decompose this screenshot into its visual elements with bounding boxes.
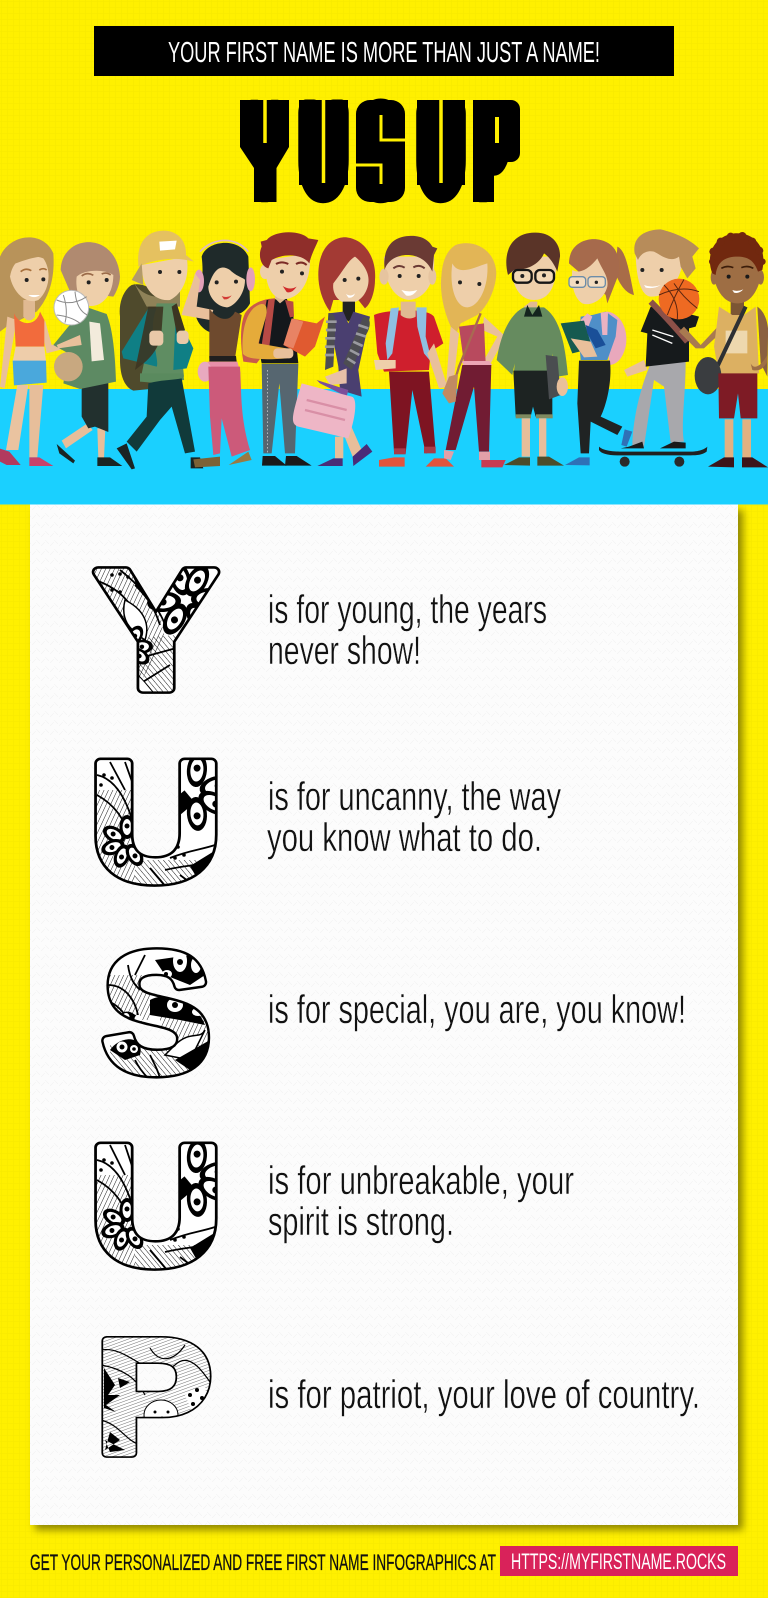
row 4 text: spirit is strong.	[268, 1200, 454, 1244]
row 1 text: is for young, the years	[268, 588, 547, 632]
person 1: girl in orange top	[0, 237, 80, 466]
row 4 text	[268, 1159, 574, 1244]
person 10: girl with ponytail and tablet	[561, 239, 634, 465]
row 2 text: is for uncanny, the way	[268, 775, 561, 819]
person 3: backpacker with cap	[117, 231, 203, 469]
row 4: decorated letter U	[94, 1142, 218, 1271]
name title: S	[362, 90, 399, 213]
header banner	[94, 26, 674, 76]
footer call to action: GET YOUR PERSONALIZED AND FREE FIRST NAME INFOGRAPHICS AT	[30, 1550, 496, 1575]
person 9: boy with glasses	[497, 233, 568, 466]
name title: P	[477, 90, 507, 212]
row 5: decorated letter P: P	[95, 1305, 212, 1488]
row 4 text: is for unbreakable, your	[268, 1159, 574, 1203]
person 5: boy reading a book	[241, 232, 325, 466]
person 4: girl with headphones	[182, 240, 255, 467]
name title: U	[420, 89, 462, 212]
row 2 text	[267, 775, 561, 860]
person 8: blonde girl	[441, 243, 506, 467]
person 2: girl with volleyball	[53, 242, 122, 466]
name title: U	[302, 89, 345, 212]
group of illustrated young people	[0, 229, 768, 469]
row 2: decorated letter U	[94, 758, 218, 887]
person 6: red-haired girl with pink bag	[293, 237, 375, 466]
row 1 text	[268, 588, 547, 673]
name title: Y	[250, 90, 279, 213]
person 7: boy in red shirt	[374, 236, 454, 467]
white content panel	[30, 504, 743, 1530]
name title	[240, 89, 520, 213]
row 3: decorated letter S: S	[102, 919, 211, 1108]
person 12: boy in yellow jersey	[695, 232, 768, 467]
person 11: skater with basketball	[599, 229, 727, 467]
row 4: decorated letter U: U	[90, 1111, 222, 1300]
row 5: decorated letter P	[101, 1336, 212, 1458]
blue floor band	[0, 389, 768, 504]
row 2: decorated letter U: U	[90, 727, 222, 916]
row 3: decorated letter S	[101, 947, 210, 1079]
row 1: decorated letter Y	[92, 566, 220, 694]
row 2 text: you know what to do.	[267, 816, 542, 860]
row 1 text: never show!	[268, 629, 421, 673]
row 1: decorated letter Y: Y	[95, 537, 217, 724]
